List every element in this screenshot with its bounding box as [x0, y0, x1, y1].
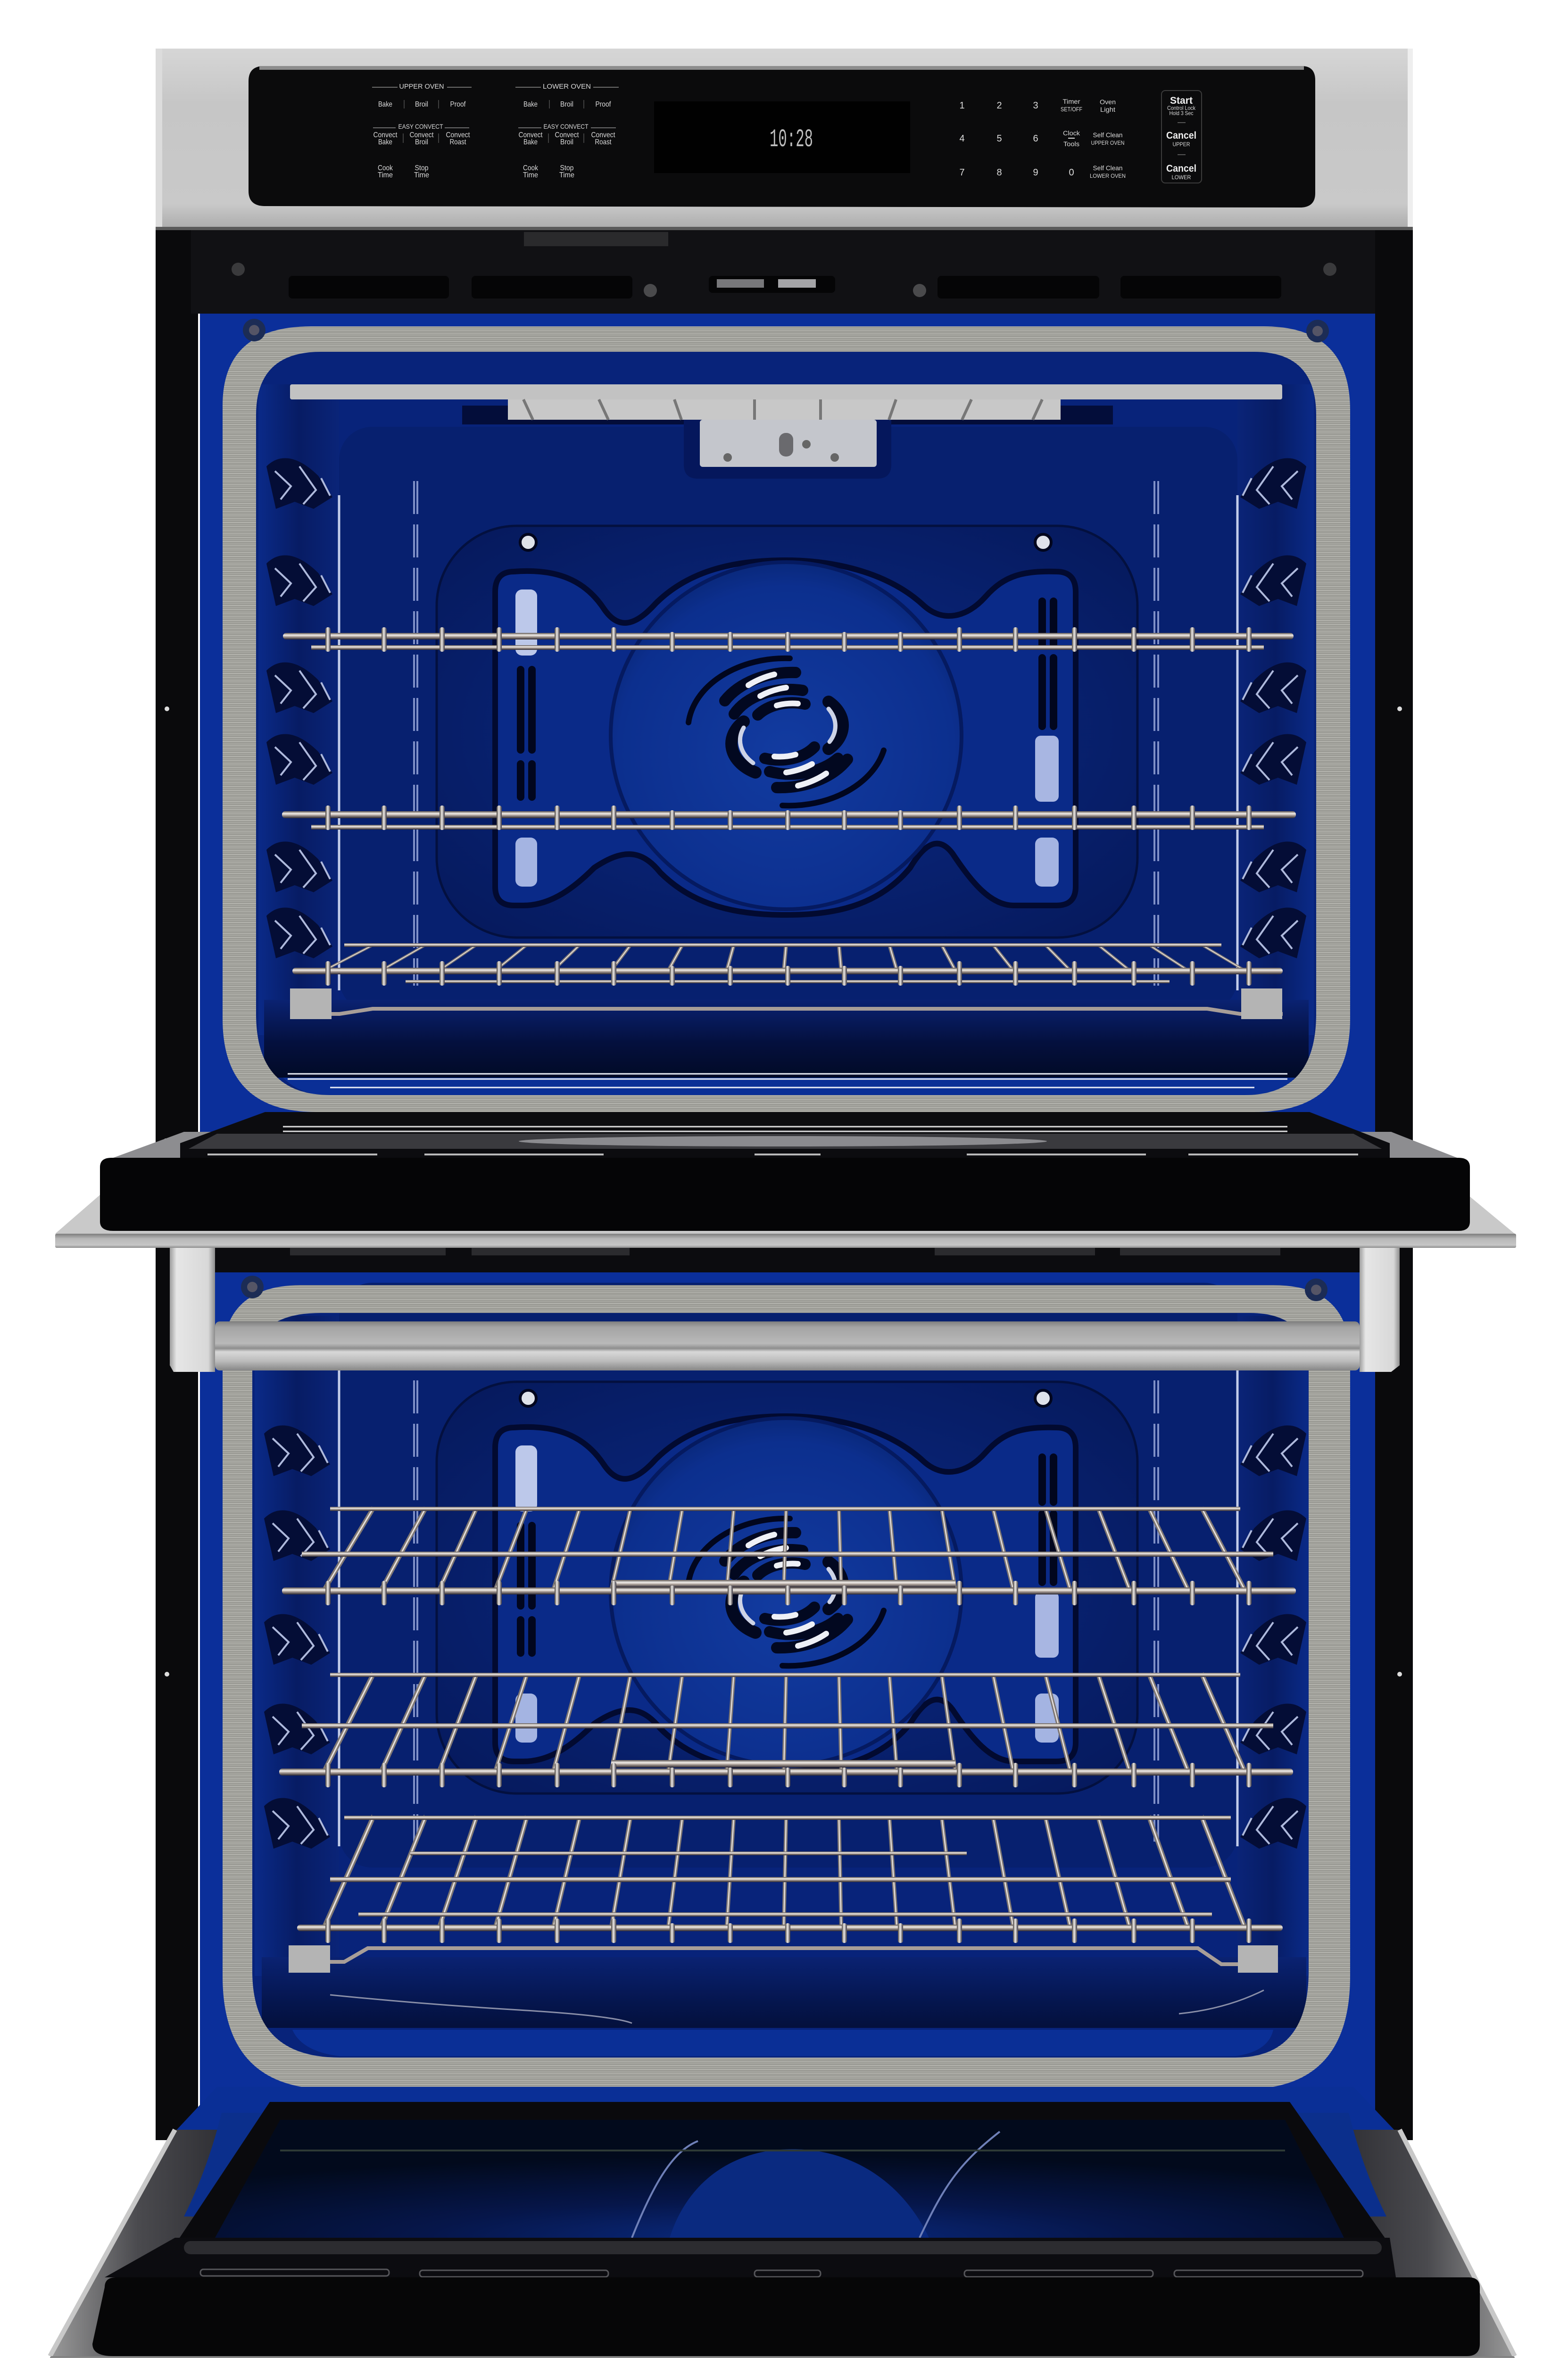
side walls lower: [255, 1316, 1308, 1976]
number keypad: 6: [1033, 133, 1038, 144]
gasket: upper oven seal: [223, 326, 1350, 1112]
number keypad: 5: [996, 133, 1002, 144]
door front black face: [100, 1158, 1470, 1231]
control labels: lower oven: Bake: [523, 100, 538, 108]
function keys: SET/OFF: [1061, 106, 1082, 113]
control labels: upper oven: Proof: [450, 100, 466, 108]
number keypad: 1: [959, 100, 965, 111]
control labels: upper oven: EASY CONVECT: [398, 123, 443, 130]
number keypad: 7: [959, 167, 965, 178]
control labels: lower oven: Roast: [595, 138, 612, 146]
rack 2 upper: [282, 805, 1296, 830]
handle arm left: [170, 1248, 215, 1372]
control labels: upper oven: Stop: [415, 164, 429, 172]
control labels: lower oven: Stop: [560, 164, 574, 172]
control labels: upper oven: Time: [414, 171, 429, 179]
control labels: lower oven: Proof: [595, 100, 611, 108]
door side steel wedges: [55, 1132, 1515, 1234]
control labels: lower oven: Convect: [519, 131, 543, 139]
hinge zone blue under gasket: [175, 2087, 1396, 2132]
control labels: upper oven: Convect: [446, 131, 470, 139]
function keys: Clock: [1063, 129, 1080, 137]
control labels: lower oven: Time: [523, 171, 538, 179]
panel: upper door open: [55, 1112, 1516, 1248]
gasket: lower oven seal: [223, 1285, 1350, 2089]
panel: oven body black side strips: [156, 230, 1413, 2140]
start and cancel keys: LOWER: [1171, 174, 1191, 181]
broil element shelf and bracket: [290, 384, 1282, 479]
wire rack B lower: [279, 1673, 1293, 1787]
function keys: Self Clean: [1093, 164, 1122, 172]
control labels: upper oven: UPPER OVEN: [399, 83, 444, 91]
function keys: Tools: [1063, 140, 1079, 148]
start and cancel keys: UPPER: [1172, 141, 1190, 148]
number keypad: 2: [996, 100, 1002, 111]
start and cancel keys: [1161, 91, 1202, 183]
control labels: lower oven: Convect: [591, 131, 615, 139]
door inner enamel frame: [175, 2102, 1390, 2245]
function keys: UPPER OVEN: [1091, 140, 1124, 146]
panel: blue enamel frame: [200, 311, 1375, 2132]
rack 1 upper: [283, 627, 1294, 652]
panel: top vent band: [191, 230, 1375, 314]
fan vent lower: [689, 1519, 884, 1666]
control glass panel: [249, 66, 1315, 208]
cavity floor lower: [262, 1957, 1306, 2056]
handle bar: [215, 1321, 1360, 1370]
control labels: upper oven: Convect: [409, 131, 434, 139]
panel: upper door handle: [170, 1248, 1400, 1372]
control labels: upper oven: Cook: [378, 164, 393, 172]
lower door front black face: [92, 2277, 1480, 2356]
control labels: upper oven: Time: [378, 171, 393, 179]
start and cancel keys: Hold 3 Sec: [1170, 110, 1193, 116]
control labels: lower oven: Broil: [560, 100, 573, 108]
function keys: Light: [1100, 106, 1115, 113]
door lip and slots: [105, 2238, 1396, 2291]
function keys: Timer: [1063, 98, 1080, 105]
frame screws lower: [241, 1276, 1327, 1301]
control labels: lower oven: Bake: [523, 138, 538, 146]
control labels: upper oven: Broil: [415, 100, 428, 108]
side walls upper: [258, 384, 1314, 1035]
panel: lower oven cavity: [252, 1283, 1309, 2058]
rack supports upper: [266, 458, 1306, 958]
clock display: 10:28: [770, 125, 813, 154]
rack 3 upper on roller frame: [290, 943, 1283, 1019]
control labels: lower oven: Cook: [523, 164, 539, 172]
number keypad: 4: [959, 133, 965, 144]
number keypad: 0: [1069, 167, 1074, 178]
panel: lower oven vent band: [210, 1245, 1361, 1272]
control labels: lower oven: Broil: [560, 138, 573, 146]
start and cancel keys: Cancel: [1166, 130, 1196, 141]
control labels: upper oven: [372, 83, 472, 179]
start and cancel keys: Control Lock: [1167, 105, 1196, 111]
control labels: upper oven: Bake: [378, 138, 392, 146]
number keypad: 3: [1033, 100, 1038, 111]
number keypad: [959, 100, 1074, 178]
door side steel trapezoids: [50, 2113, 1515, 2356]
fan vent upper: [689, 658, 884, 805]
function keys: LOWER OVEN: [1090, 173, 1126, 179]
control labels: lower oven: Convect: [555, 131, 579, 139]
panel: upper oven cavity: [256, 352, 1316, 1095]
door glass with cavity reflection: [215, 2120, 1344, 2238]
wire rack A lower: [282, 1507, 1296, 1605]
number keypad: 8: [996, 167, 1002, 178]
cavity floor upper: [264, 1000, 1309, 1095]
number keypad: 9: [1033, 167, 1038, 178]
control labels: upper oven: Broil: [415, 138, 428, 146]
start and cancel keys: Start: [1170, 95, 1193, 106]
panel: lower door open: [50, 2087, 1515, 2358]
control labels: lower oven: Time: [559, 171, 574, 179]
control labels: upper oven: Roast: [450, 138, 466, 146]
lower door steel bar: [50, 2356, 1515, 2358]
door inner enamel: [180, 1112, 1390, 1158]
function keys: Self Clean: [1093, 131, 1122, 139]
control labels: lower oven: EASY CONVECT: [543, 123, 589, 130]
start and cancel keys: Cancel: [1166, 163, 1196, 174]
panel: control panel steel fascia: [156, 49, 1413, 231]
handle arm right: [1360, 1248, 1400, 1372]
function keys: [1061, 98, 1126, 179]
door bottom steel bar: [55, 1234, 1516, 1248]
control labels: lower oven: [515, 83, 619, 179]
control labels: upper oven: Bake: [378, 100, 392, 108]
rack supports lower: [264, 1426, 1306, 1849]
control labels: upper oven: Convect: [373, 131, 398, 139]
wire rack C lower on roller frame: [289, 1816, 1283, 1973]
function keys: Oven: [1100, 98, 1116, 106]
control labels: lower oven: LOWER OVEN: [543, 83, 591, 91]
frame screws upper: [243, 319, 1329, 342]
